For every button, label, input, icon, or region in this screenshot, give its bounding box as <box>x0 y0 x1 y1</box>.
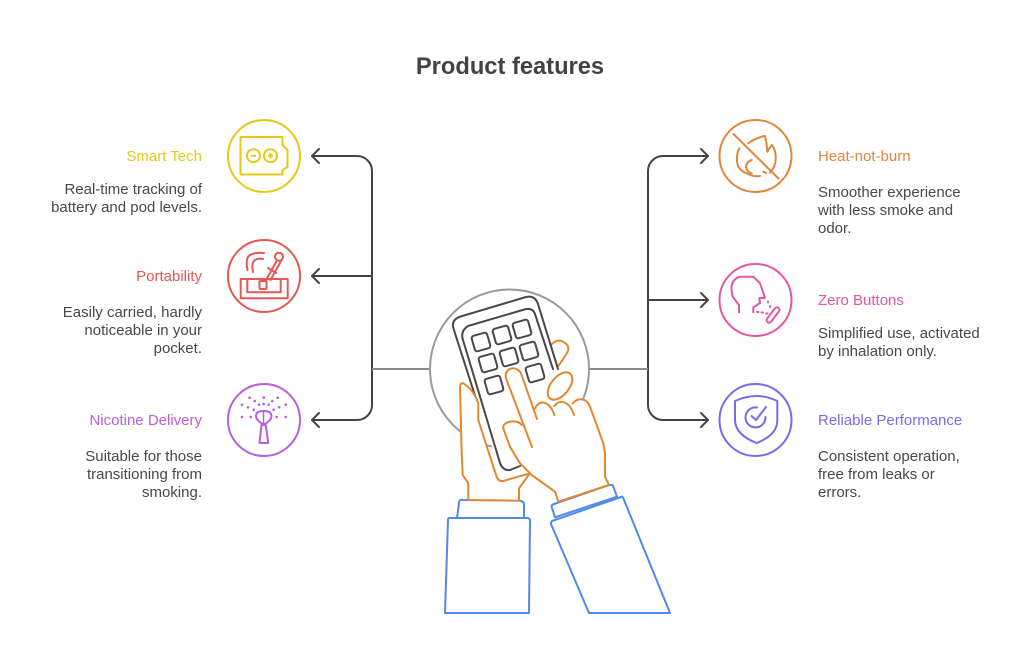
thumb nail finger <box>543 368 577 404</box>
device <box>453 297 558 481</box>
central illustration: hands holding device <box>430 290 670 613</box>
text: Reliable Performance description: errors. <box>818 484 861 501</box>
text: Heat-not-burn description: odor. <box>818 220 851 237</box>
feature: Smart Tech <box>51 120 300 216</box>
icon: head inhaling <box>720 264 792 336</box>
right sleeve <box>551 497 670 613</box>
icon: circuit board <box>228 120 300 192</box>
icon: spray <box>228 384 300 456</box>
heading: Reliable Performance: Reliable Performance <box>818 412 962 429</box>
left cuff <box>457 500 524 518</box>
title: Product features <box>416 54 604 80</box>
icon: shield check <box>720 384 792 456</box>
text: Heat-not-burn description: Smoother experience <box>818 184 961 201</box>
heading: Portability: Portability <box>136 268 202 285</box>
left sleeve <box>445 518 530 613</box>
icon: no flame <box>720 120 792 192</box>
right hand <box>503 367 609 502</box>
text: Reliable Performance description: Consistent operation, <box>818 448 960 465</box>
left connector arrows <box>312 149 372 427</box>
icon: device in pocket <box>228 240 300 312</box>
right cuff <box>552 485 617 517</box>
back finger <box>551 341 568 367</box>
text: Zero Buttons description: by inhalation only. <box>818 343 937 360</box>
text: Nicotine Delivery description: smoking. <box>142 484 202 501</box>
text: Portability description: noticeable in your <box>84 322 202 339</box>
text: Nicotine Delivery description: transitioning from <box>87 466 202 483</box>
feature: Zero Buttons <box>720 264 980 360</box>
heading: Nicotine Delivery: Nicotine Delivery <box>89 412 202 429</box>
feature: Nicotine Delivery <box>85 384 300 501</box>
heading: Zero Buttons: Zero Buttons <box>818 292 904 309</box>
right connector arrows <box>648 149 708 427</box>
text: Portability description: Easily carried, hardly <box>63 304 202 321</box>
text: Smart Tech description: battery and pod levels. <box>51 199 202 216</box>
text: Smart Tech description: Real-time tracking of <box>64 181 202 198</box>
left hand <box>460 383 530 501</box>
text: Heat-not-burn description: with less smoke and <box>817 202 953 219</box>
text: Reliable Performance description: free from leaks or <box>818 466 935 483</box>
feature: Portability <box>63 240 300 357</box>
text: Nicotine Delivery description: Suitable for those <box>85 448 202 465</box>
centre connector lines <box>372 368 648 370</box>
feature: Heat-not-burn <box>720 120 961 237</box>
heading: Smart Tech: Smart Tech <box>126 148 202 165</box>
text: Zero Buttons description: Simplified use, activated <box>818 325 980 342</box>
feature: Reliable Performance <box>720 384 962 501</box>
text: Portability description: pocket. <box>154 340 202 357</box>
central circle <box>430 290 589 448</box>
heading: Heat-not-burn: Heat-not-burn <box>818 148 911 165</box>
